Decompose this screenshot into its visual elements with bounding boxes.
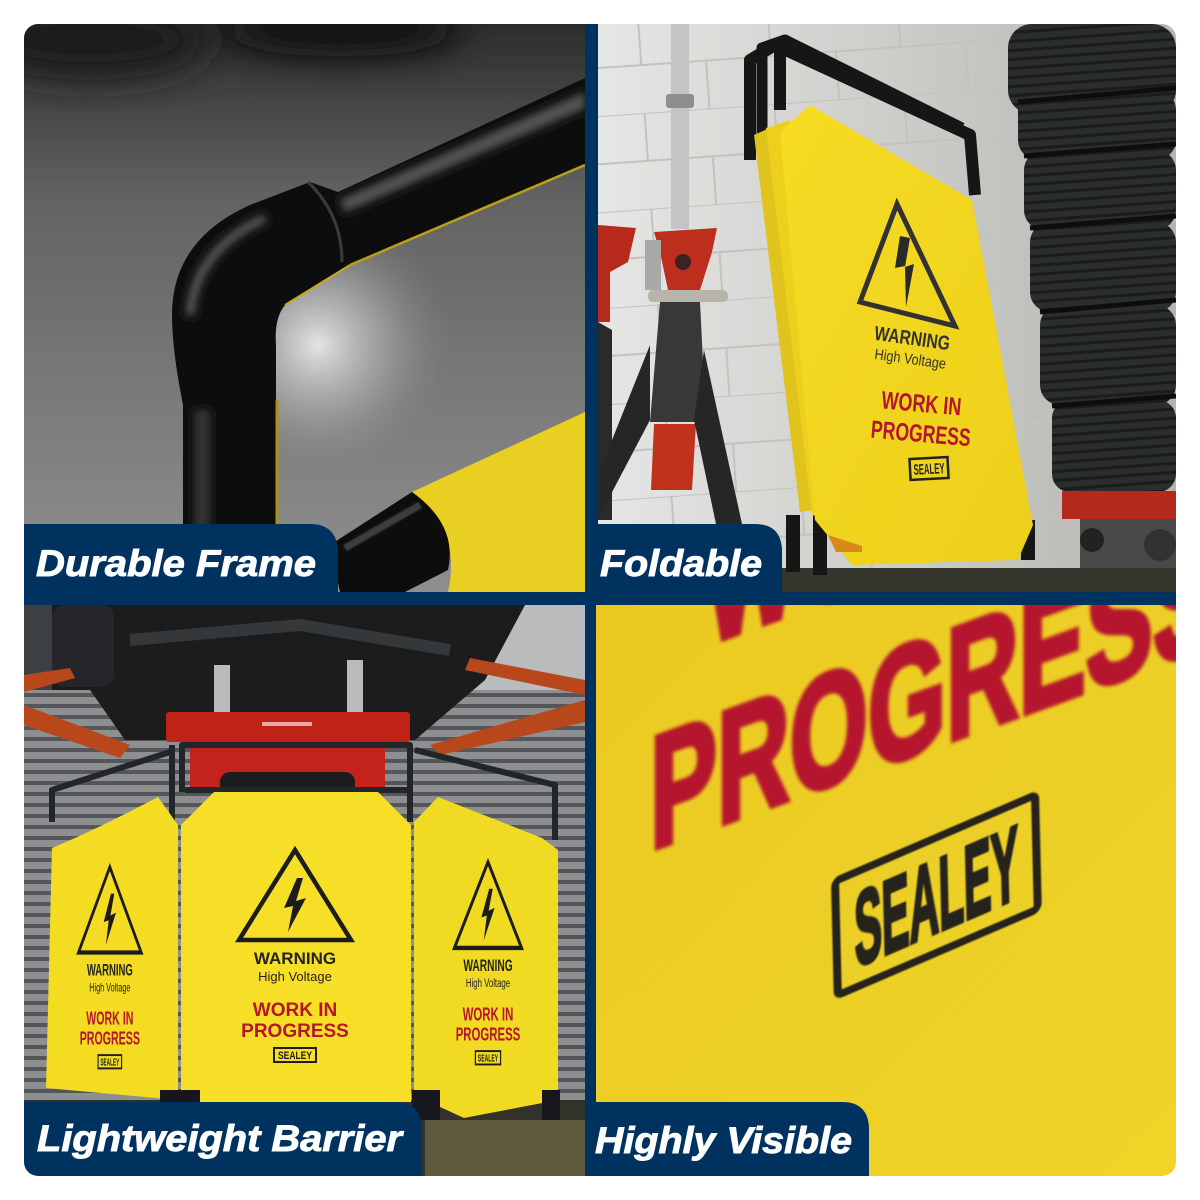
- photo: orange lift arms: [24, 658, 585, 758]
- panel: highly visible: [596, 605, 1176, 1176]
- photo: yellow fabric corner: [330, 412, 585, 592]
- sealey logo: [910, 457, 949, 480]
- label: foldable: [598, 524, 782, 592]
- label: highly visible: Highly Visible: [595, 1120, 852, 1161]
- label: durable frame: [24, 524, 338, 592]
- large progress text: WO: [705, 439, 875, 680]
- label: foldable: Foldable: [600, 543, 762, 584]
- sign text: WARNING: [873, 323, 951, 355]
- photo: vehicle underside: [52, 605, 525, 740]
- barrier panel: left: [46, 797, 178, 1100]
- work in progress text: WORK IN: [880, 386, 962, 421]
- barrier panel: right: [414, 797, 558, 1118]
- label: highly visible: [595, 1102, 869, 1176]
- photo: wall conduit: [666, 24, 694, 229]
- photo: stacked tyres: [1008, 24, 1176, 568]
- work in progress text: PROGRESS: [870, 416, 972, 452]
- sign text: [875, 326, 950, 371]
- work in progress text: [871, 391, 970, 446]
- photo: black tube elbow: [172, 78, 585, 530]
- photo: red tool chest: [166, 712, 410, 796]
- panel: durable frame: [0, 0, 585, 592]
- sealey logo large: [835, 795, 1038, 998]
- photo: barrier frames: [52, 745, 555, 840]
- photo: folded yellow barrier panels: [754, 105, 1033, 565]
- sign text: High Voltage: [873, 346, 947, 373]
- warning triangle icon: [860, 204, 955, 326]
- panel: lightweight barrier: [24, 605, 585, 1176]
- label: lightweight barrier: Lightweight Barrier: [37, 1118, 405, 1159]
- panel: foldable: [598, 24, 1176, 592]
- sealey logo: SEALEY: [913, 460, 945, 479]
- large progress text: [652, 605, 1176, 853]
- barrier panel: center: [181, 792, 411, 1102]
- label: durable frame: Durable Frame: [36, 543, 316, 584]
- photo: barrier feet: [160, 1090, 560, 1120]
- photo: folded barrier frame: [750, 40, 1028, 575]
- photo: axle stands: [598, 225, 742, 524]
- label: lightweight barrier: [24, 1102, 422, 1176]
